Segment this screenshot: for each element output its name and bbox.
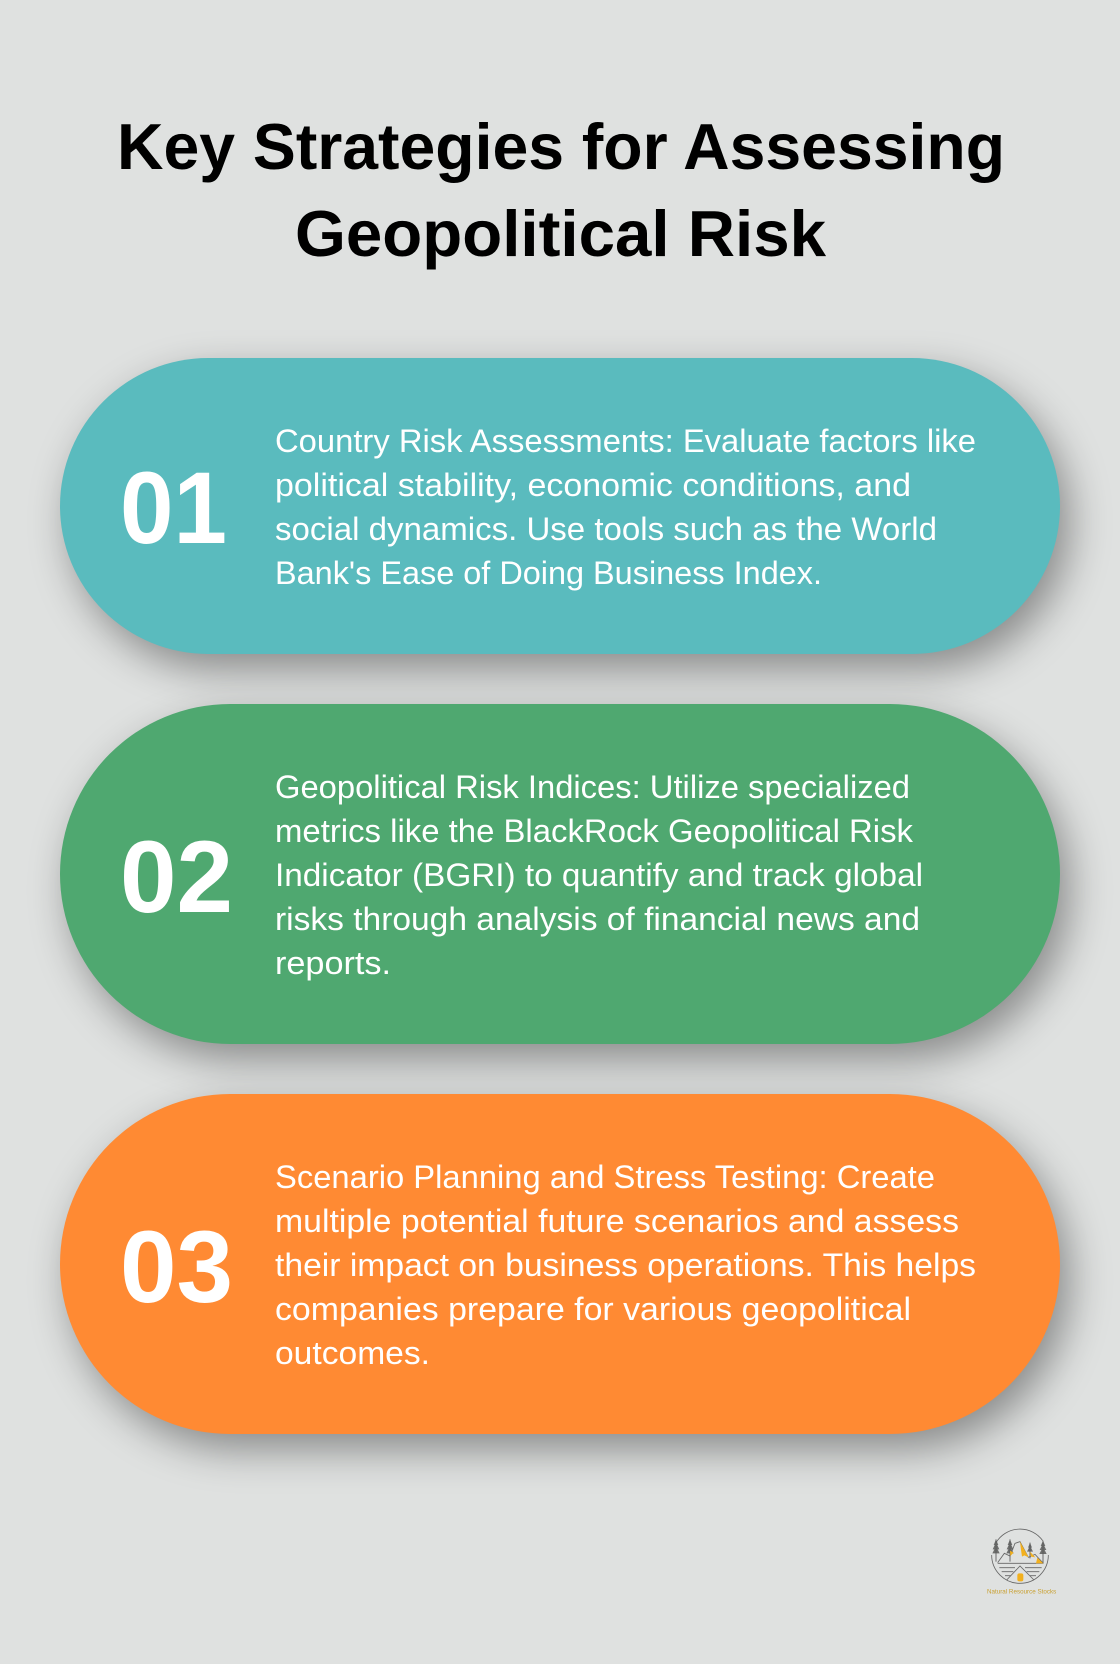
description: country risk assessments: political stability, economic conditions, and <box>275 467 911 503</box>
description: geopolitical risk indices: metrics like the BlackRock Geopolitical Risk <box>275 813 914 849</box>
number 02: 02 <box>120 820 233 934</box>
panel: country risk assessments <box>60 358 1060 654</box>
panel: geopolitical risk indices <box>60 704 1060 1044</box>
description: geopolitical risk indices: risks through analysis of financial news and <box>275 901 920 937</box>
description: scenario planning and stress testing: outcomes. <box>275 1335 430 1371</box>
panel: scenario planning and stress testing <box>60 1094 1060 1434</box>
description: country risk assessments: social dynamics. Use tools such as the World <box>275 511 937 547</box>
title <box>117 110 1005 270</box>
description: country risk assessments: Bank's Ease of Doing Business Index. <box>275 555 822 591</box>
logo wordmark: Natural Resource Stocks <box>987 1589 1056 1596</box>
description: scenario planning and stress testing <box>275 1159 976 1371</box>
title: Key Strategies for Assessing <box>117 110 1005 183</box>
description: scenario planning and stress testing: companies prepare for various geopolitical <box>275 1291 911 1327</box>
description: scenario planning and stress testing: Scenario Planning and Stress Testing: Create <box>275 1159 935 1195</box>
description: country risk assessments: Country Risk Assessments: Evaluate factors like <box>275 423 976 459</box>
number 03: 03 <box>120 1210 233 1324</box>
number 01: 01 <box>120 451 227 565</box>
description: scenario planning and stress testing: their impact on business operations. This helps <box>275 1247 976 1283</box>
description: scenario planning and stress testing: multiple potential future scenarios and assess <box>275 1203 959 1239</box>
description: geopolitical risk indices <box>275 769 923 981</box>
description: geopolitical risk indices: reports. <box>275 945 391 981</box>
description: geopolitical risk indices: Indicator (BGRI) to quantify and track global <box>275 857 923 893</box>
description: country risk assessments <box>275 423 976 591</box>
icon: natural resource stocks logo <box>987 1528 1056 1596</box>
description: geopolitical risk indices: Geopolitical Risk Indices: Utilize specialized <box>275 769 910 805</box>
title: Geopolitical Risk <box>295 197 827 270</box>
